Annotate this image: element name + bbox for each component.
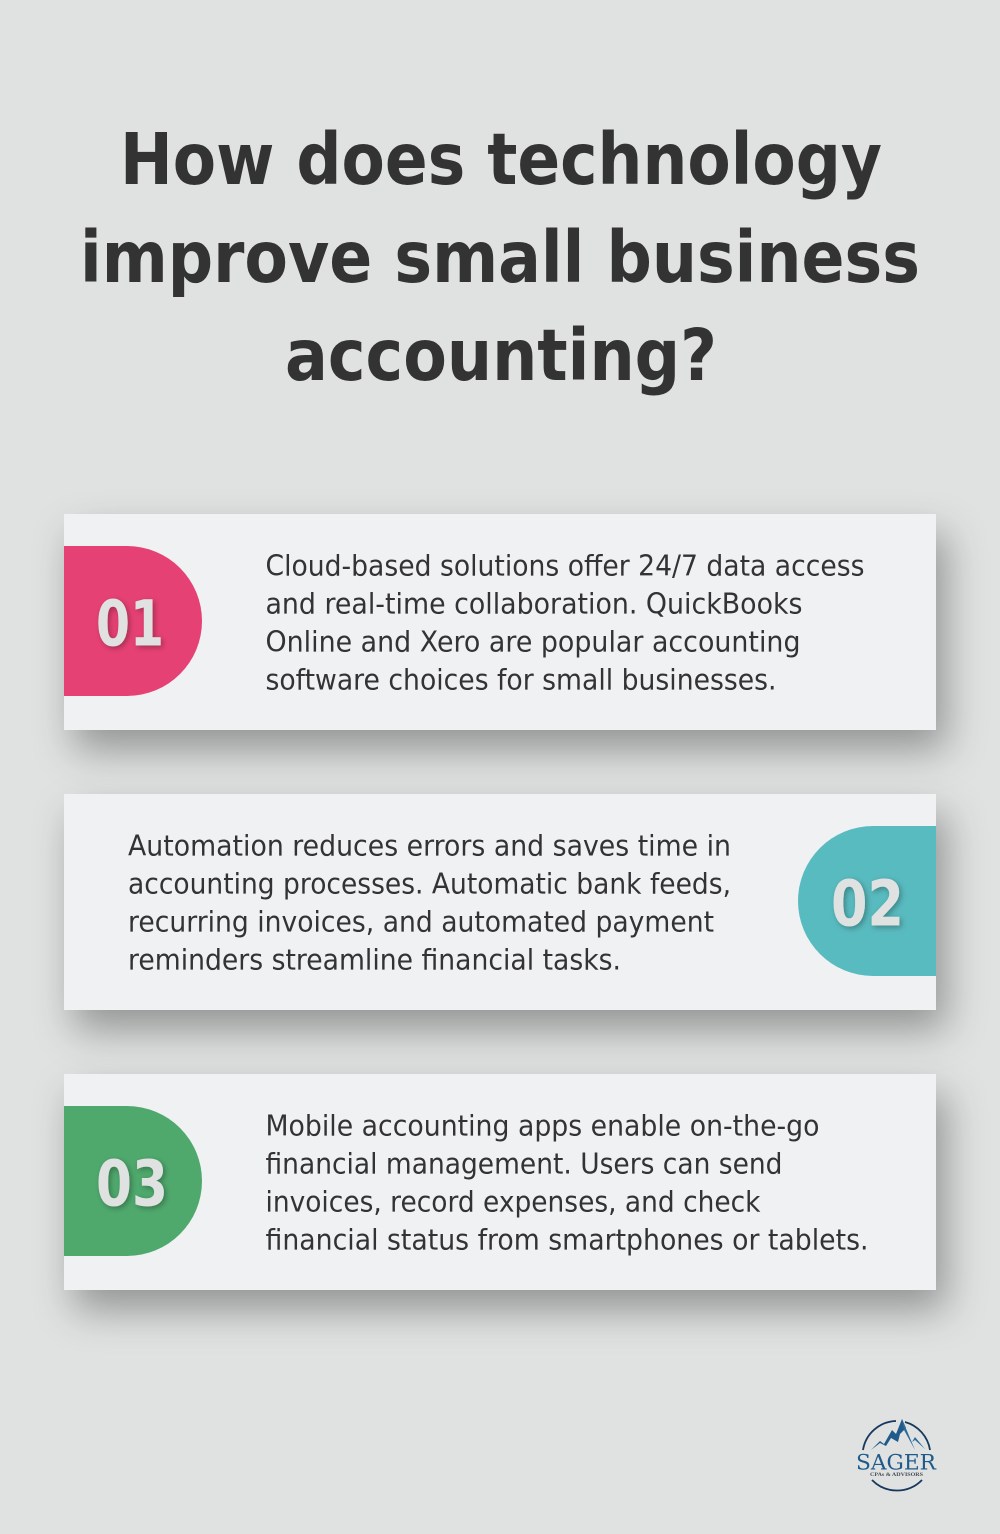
panel: step 01 bbox=[64, 514, 936, 730]
card background 02 bbox=[64, 794, 936, 1010]
panel: step 02 bbox=[64, 794, 936, 1010]
title: accounting? bbox=[285, 314, 717, 397]
number 01: 01 bbox=[96, 588, 164, 660]
text: step 03: Mobile accounting apps enable on-the-go bbox=[266, 1110, 820, 1142]
number tab 01 bbox=[64, 546, 202, 696]
number 03: 03 bbox=[96, 1148, 168, 1220]
text: step 01 bbox=[266, 550, 864, 696]
text: step 03: invoices, record expenses, and check bbox=[266, 1186, 761, 1218]
text: step 01: Cloud-based solutions offer 24/7 data access bbox=[266, 550, 864, 582]
title: improve small business bbox=[80, 216, 920, 299]
text: step 03 bbox=[266, 1110, 868, 1256]
text: step 02: accounting processes. Automatic bank feeds, bbox=[128, 868, 731, 900]
card background 03 bbox=[64, 1074, 936, 1290]
number 02: 02 bbox=[831, 868, 904, 940]
icon: Sager logo: CPAs & ADVISORS bbox=[870, 1473, 923, 1478]
text: step 02: Automation reduces errors and saves time in bbox=[128, 830, 731, 862]
text: step 02: reminders streamline financial tasks. bbox=[128, 944, 621, 976]
text: step 01: Online and Xero are popular accounting bbox=[266, 626, 800, 658]
number tab 03 bbox=[64, 1106, 202, 1256]
icon: Sager logo: SAGER bbox=[856, 1450, 937, 1474]
text: step 01: and real-time collaboration. QuickBooks bbox=[266, 588, 802, 620]
text: step 02: recurring invoices, and automated payment bbox=[128, 906, 714, 938]
icon: Sager logo bbox=[856, 1419, 937, 1491]
text: step 03: financial management. Users can send bbox=[266, 1148, 782, 1180]
number tab 02 bbox=[798, 826, 936, 976]
text: step 01: software choices for small businesses. bbox=[266, 664, 776, 696]
title: How does technology bbox=[120, 118, 882, 201]
card background 01 bbox=[64, 514, 936, 730]
panel: step 03 bbox=[64, 1074, 936, 1290]
text: step 03: financial status from smartphones or tablets. bbox=[266, 1224, 868, 1256]
title bbox=[80, 118, 920, 397]
text: step 02 bbox=[128, 830, 731, 976]
